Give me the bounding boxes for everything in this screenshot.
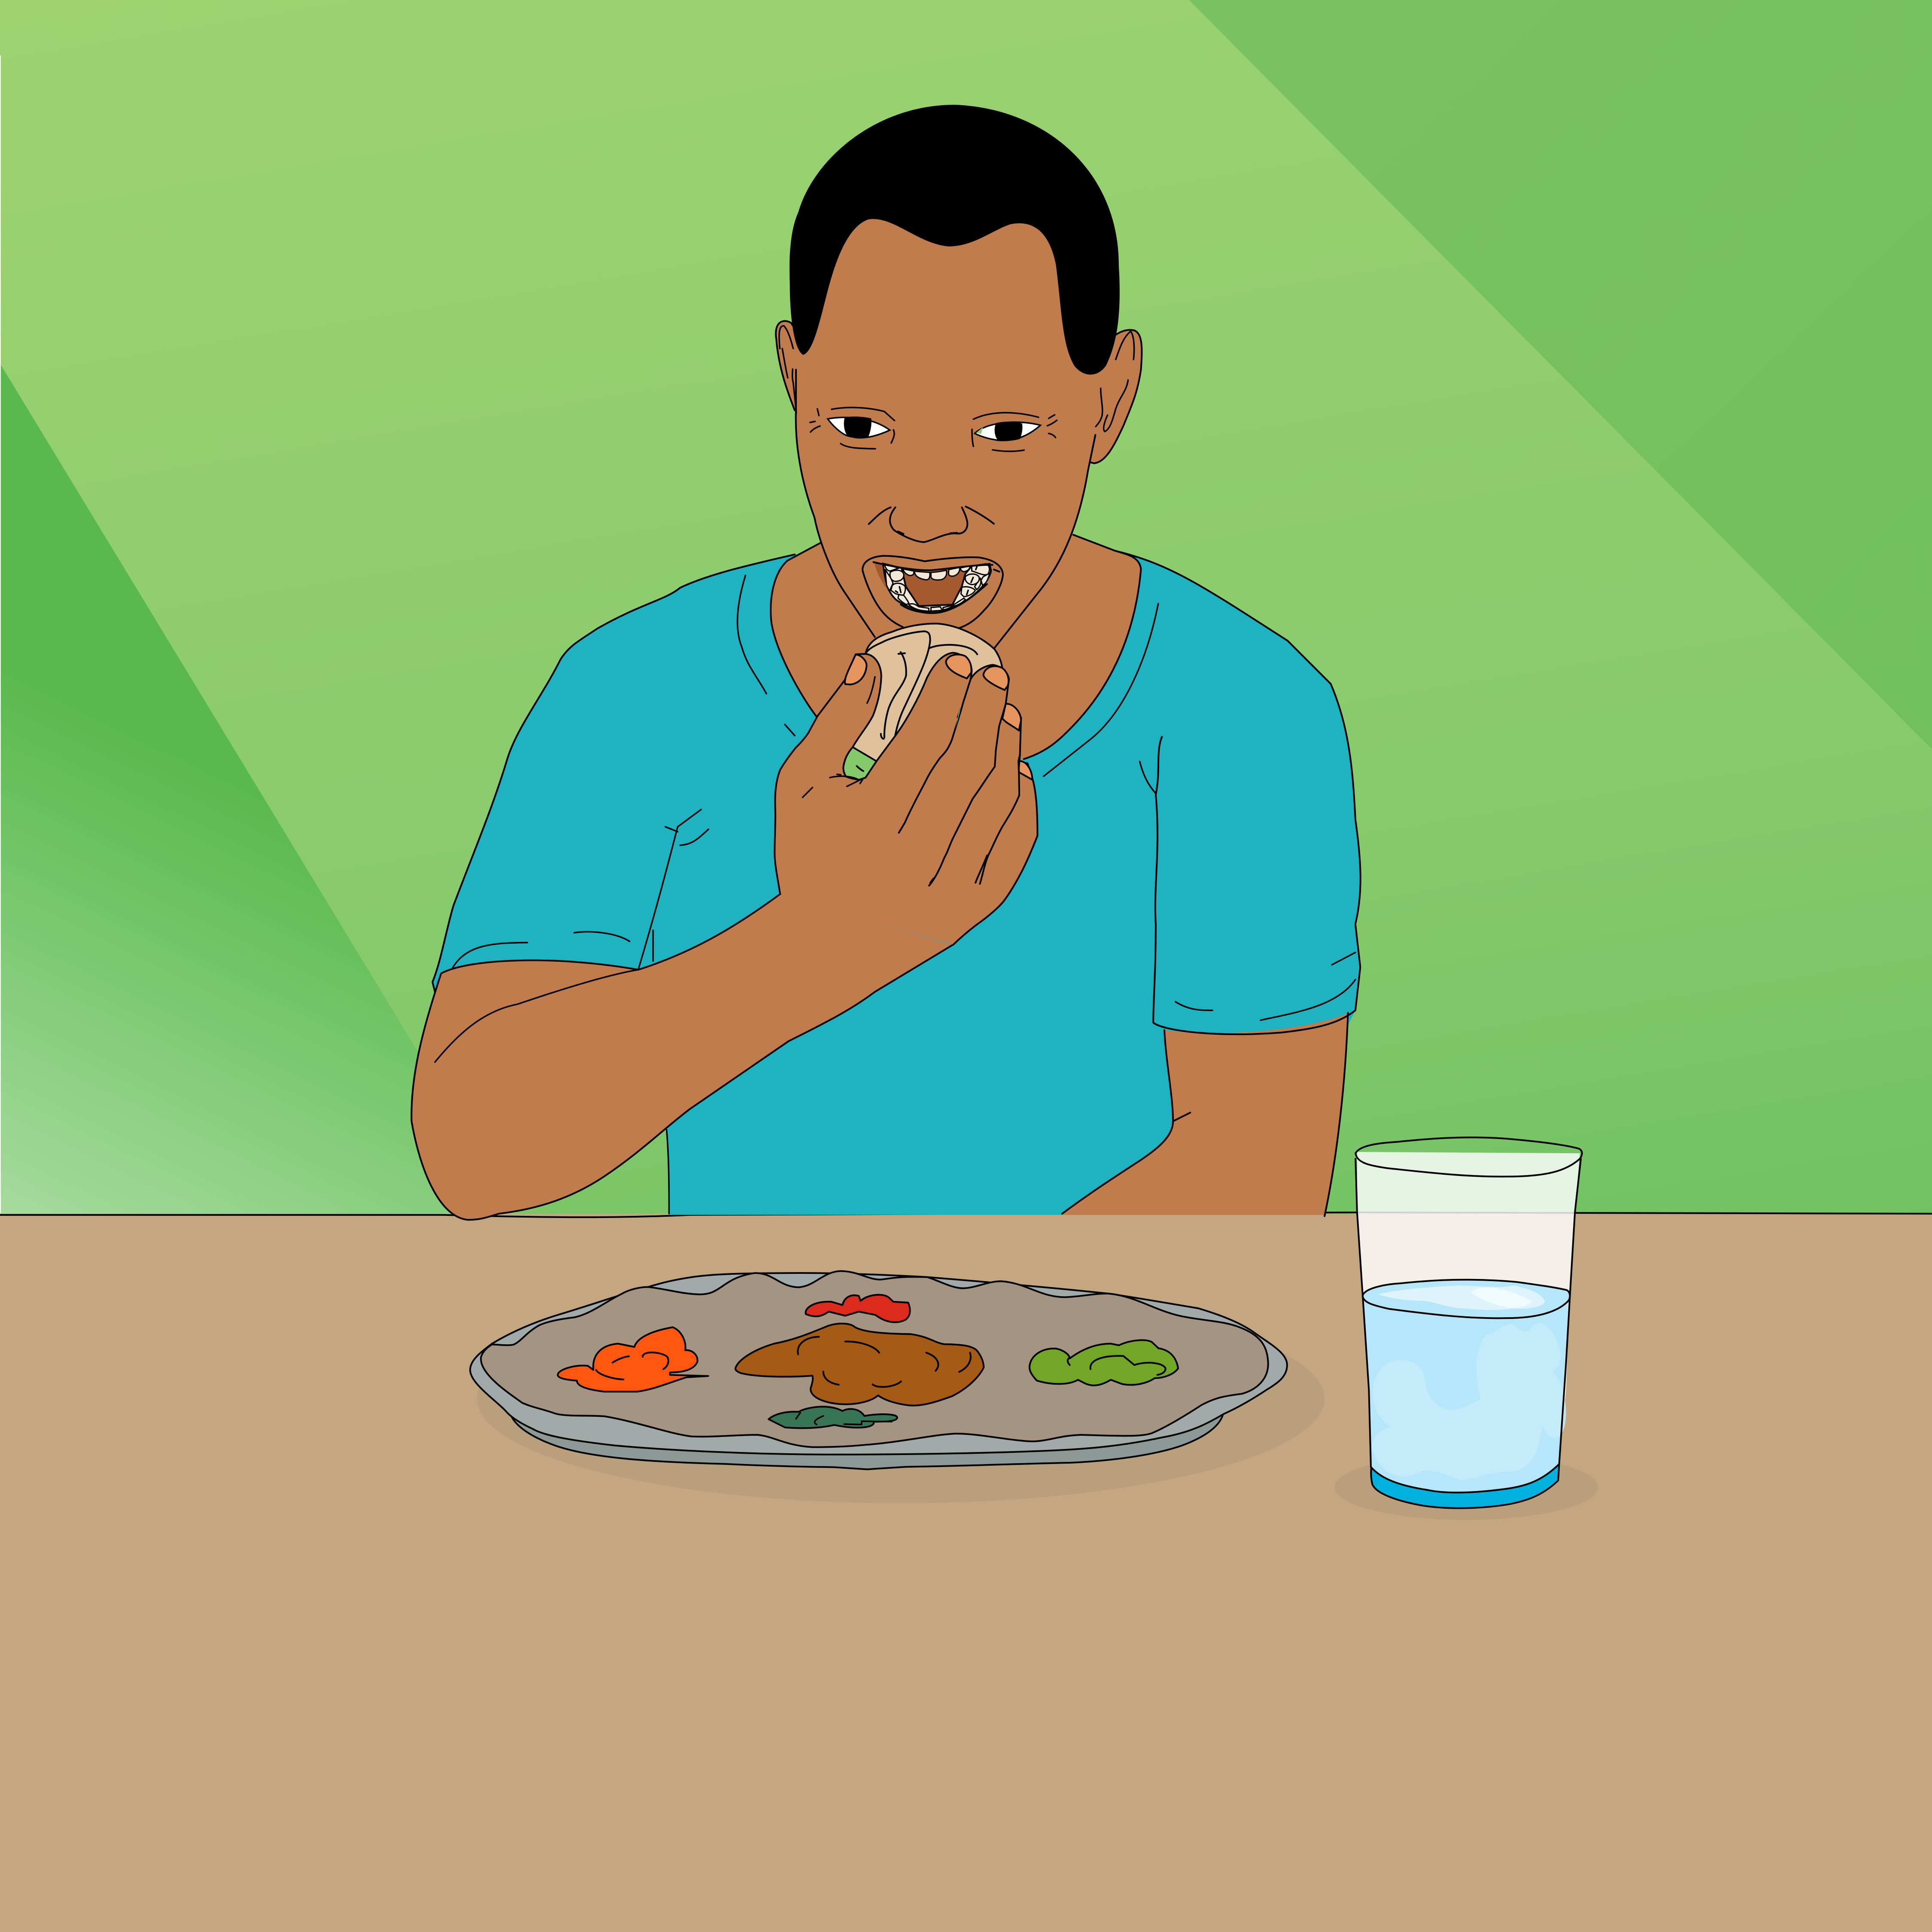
person xyxy=(432,105,1361,1216)
hand holding food xyxy=(775,623,1037,945)
injera surface xyxy=(481,1271,1268,1447)
glass outlines xyxy=(1355,1159,1581,1467)
right arm xyxy=(1062,1013,1348,1216)
teeth xyxy=(884,564,990,611)
eye creases and brows xyxy=(810,407,1057,451)
facial details xyxy=(779,326,1134,542)
glass rim xyxy=(1355,1137,1582,1177)
right ear xyxy=(1089,330,1142,463)
left eye xyxy=(828,416,890,439)
ear details xyxy=(779,326,1134,431)
teal t-shirt fill xyxy=(432,551,1361,1215)
green stew xyxy=(1030,1340,1178,1385)
plate rim xyxy=(470,1273,1287,1455)
finger lines xyxy=(899,679,1020,886)
food parcel: injera xyxy=(843,623,1003,779)
hair xyxy=(790,105,1120,375)
water xyxy=(1363,1280,1570,1492)
plate shadow xyxy=(477,1294,1324,1503)
mouth with teeth xyxy=(873,562,991,611)
plate with food xyxy=(470,1271,1287,1469)
fingernails xyxy=(845,654,1033,780)
glass of water xyxy=(1355,1137,1582,1508)
face xyxy=(796,210,1109,648)
plate base xyxy=(510,1413,1223,1469)
neck xyxy=(771,535,1141,789)
red stew xyxy=(805,1295,910,1322)
water surface xyxy=(1363,1280,1570,1318)
glass body xyxy=(1357,1152,1580,1467)
table top xyxy=(0,1212,1932,1932)
brown stew xyxy=(735,1324,984,1406)
blue glass base xyxy=(1371,1464,1559,1508)
left arm xyxy=(411,893,952,1220)
nose xyxy=(869,507,994,542)
ice and light reflections xyxy=(1372,1285,1566,1480)
glass shadow xyxy=(1334,1455,1598,1520)
hand fill and outline xyxy=(775,653,1037,945)
arm crease xyxy=(435,970,638,1062)
dark green stew xyxy=(769,1406,897,1428)
lips and chin xyxy=(863,556,1003,628)
left ear xyxy=(776,321,813,413)
right eye xyxy=(975,422,1040,441)
background: green wall xyxy=(0,0,1932,1215)
orange stew xyxy=(558,1327,708,1391)
t-shirt outlines and folds xyxy=(432,551,1361,1214)
